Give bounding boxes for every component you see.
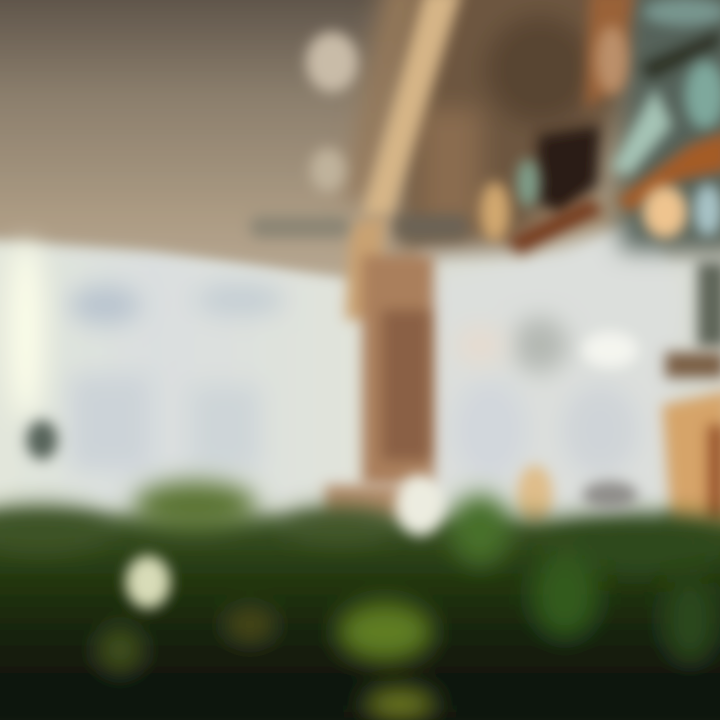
ceiling: left taupe panel (0, 0, 420, 285)
white facade (0, 215, 680, 530)
timber beam (345, 0, 462, 320)
right edge: lower building and timber (517, 262, 720, 535)
ceiling lights (306, 32, 358, 192)
ceiling: right brown panel (400, 0, 640, 250)
upper right building: glass and wood balconies (480, 0, 720, 255)
grey blurred sign across the beam (250, 214, 469, 240)
white flowers and small tree (26, 420, 638, 608)
timber column (325, 255, 434, 520)
foliage band (0, 481, 720, 720)
